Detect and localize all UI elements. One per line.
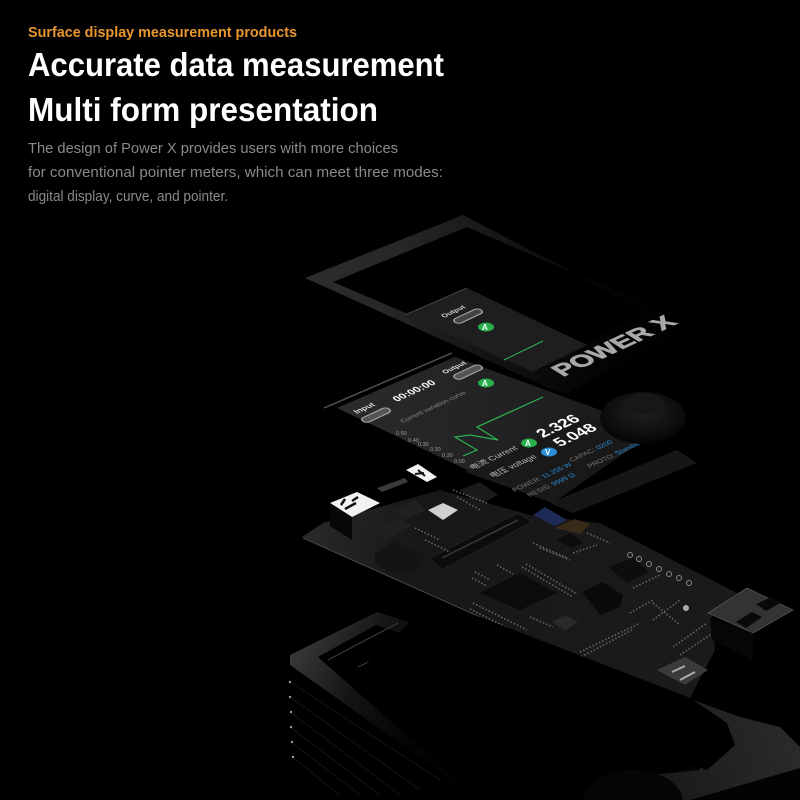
inductor bbox=[375, 540, 423, 575]
chart axis labels: 0.30 bbox=[430, 447, 441, 453]
case knob hole bbox=[583, 770, 683, 800]
chart caption: Current variation curve bbox=[399, 390, 468, 424]
white connector large bbox=[330, 492, 380, 540]
case fins bbox=[290, 682, 440, 795]
silver chip bbox=[428, 503, 458, 520]
bezel output pill bbox=[452, 308, 484, 324]
input label: Input bbox=[352, 401, 377, 415]
green curve chart bbox=[455, 397, 543, 456]
description text bbox=[28, 140, 443, 205]
timer: 00:00:00 bbox=[390, 378, 439, 404]
chart axis labels: 0.30 bbox=[418, 442, 429, 448]
output label: Output bbox=[440, 359, 469, 375]
power stat: POWER: 11.255 W bbox=[510, 461, 574, 493]
POWER X logo: POWER X bbox=[546, 312, 683, 380]
voltage V badge bbox=[541, 448, 557, 457]
lower shadow over case bbox=[357, 600, 735, 780]
SMD pad rows bbox=[415, 490, 710, 677]
current A badge bbox=[521, 438, 537, 448]
USB port on board right bbox=[708, 588, 793, 633]
current A badge: A bbox=[525, 439, 531, 448]
input pill bbox=[360, 407, 392, 423]
A badge: A bbox=[482, 379, 488, 388]
voltage V badge: V bbox=[545, 448, 551, 457]
voltage value: 5.048 bbox=[549, 421, 601, 449]
main title bbox=[28, 46, 444, 128]
bezel A badge bbox=[478, 322, 494, 332]
A badge bbox=[478, 378, 494, 388]
circuit board bbox=[302, 464, 793, 698]
chart axis labels: 0.00 bbox=[454, 459, 465, 465]
test point ring pads bbox=[628, 552, 692, 586]
description text: The design of Power X provides users with more choices bbox=[28, 140, 398, 157]
resistance stat: RESIS: 9999 Ω bbox=[525, 471, 578, 498]
chart axis labels: 0.40 bbox=[408, 438, 419, 444]
voltage label: 电压 voltage bbox=[486, 452, 539, 479]
case fin highlights bbox=[289, 681, 294, 758]
protocol stat: PROTO: Standard bbox=[585, 438, 647, 469]
ribbon cable bbox=[533, 450, 697, 534]
chart axis labels: 0.30 bbox=[442, 453, 453, 459]
case right plate bbox=[590, 700, 800, 800]
chart axis labels: 0.50 bbox=[396, 431, 407, 437]
readout block bbox=[465, 415, 650, 503]
micro USB port bbox=[657, 657, 708, 685]
main title: Accurate data measurement bbox=[28, 46, 444, 83]
connector socket bbox=[430, 513, 532, 570]
white connector small bbox=[406, 464, 437, 482]
front bezel frame bbox=[305, 215, 683, 393]
black chips bbox=[480, 573, 557, 610]
bezel green curve bbox=[504, 341, 543, 360]
bezel A badge: A bbox=[482, 323, 488, 332]
current value: 2.326 bbox=[532, 412, 584, 440]
chart axis labels bbox=[396, 431, 465, 465]
description text: for conventional pointer meters, which can meet three modes: bbox=[28, 164, 443, 181]
current label: 电流 Current bbox=[466, 443, 520, 471]
display screen bbox=[324, 353, 650, 503]
bezel output label: Output bbox=[439, 303, 468, 319]
capacity stat: CAPAC: 0200 bbox=[567, 439, 615, 463]
screen seen through bezel bbox=[405, 288, 587, 372]
small grey connector bbox=[377, 478, 408, 492]
eyebrow heading: Surface display measurement products bbox=[28, 25, 297, 41]
main title: Multi form presentation bbox=[28, 91, 378, 128]
case cavity bbox=[318, 625, 720, 800]
heatsink case bbox=[289, 612, 800, 800]
output pill bbox=[452, 364, 484, 380]
rotary knob bbox=[600, 392, 686, 444]
description text: digital display, curve, and pointer. bbox=[28, 188, 228, 205]
